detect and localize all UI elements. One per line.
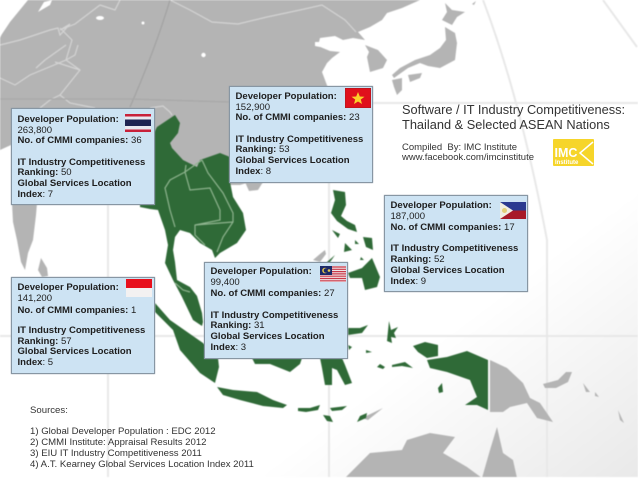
panel: Thailand: Ranking: 50	[18, 167, 72, 178]
compiled by credit: Compiled By: IMC Institute	[402, 142, 517, 153]
panel: Thailand: Index: 7	[18, 189, 53, 200]
title: Thailand & Selected ASEAN Nations	[402, 117, 610, 132]
panel: Philippines: 187,000	[390, 211, 425, 222]
panel: Vietnam: IT Industry Competitiveness	[236, 134, 363, 145]
panel: Vietnam: Developer Population:	[236, 91, 337, 102]
panel: Thailand: Global Services Location	[18, 178, 132, 189]
panel: Malaysia: Ranking: 31	[210, 320, 265, 331]
title: Software / IT Industry Competitiveness:	[402, 102, 625, 117]
panel: Malaysia: IT Industry Competitiveness	[210, 310, 338, 320]
panel: Philippines: Global Services Location	[390, 265, 505, 276]
panel: Vietnam: No. of CMMI companies: 23	[236, 112, 360, 123]
panel: Vietnam: Index: 8	[236, 166, 271, 177]
green land: Indonesia, Malaysia, Thailand, Vietnam, Philippines and neighbours	[140, 115, 488, 422]
panel: Indonesia: Developer Population:	[18, 282, 119, 293]
panel: Malaysia	[204, 262, 348, 359]
panel: Philippines: Ranking: 52	[390, 254, 445, 265]
panel: Philippines: Index: 9	[390, 276, 426, 286]
sources: 1) Global Developer Population : EDC 2012	[30, 426, 216, 437]
sources	[30, 405, 254, 470]
sources: Sources:	[30, 405, 68, 416]
panel: Thailand	[11, 108, 155, 205]
panel: Philippines: IT Industry Competitiveness	[390, 243, 518, 254]
panel: Philippines	[384, 195, 528, 292]
compiled by credit: www.facebook.com/imcinstitute	[402, 152, 534, 163]
panel: Philippines: No. of CMMI companies: 17	[390, 222, 515, 233]
icon: IMC Institute logo: Institute	[555, 160, 579, 166]
sources: 2) CMMI Institute: Appraisal Results 2012	[30, 437, 206, 448]
flag: Indonesia	[126, 279, 152, 297]
panel: Thailand: IT Industry Competitiveness	[18, 157, 145, 168]
panel: Malaysia: Developer Population:	[210, 266, 312, 277]
flag: Thailand	[125, 114, 151, 132]
panel: Vietnam: Global Services Location	[236, 155, 350, 166]
panel: Indonesia: IT Industry Competitiveness	[18, 325, 145, 336]
panel: Thailand: 263,800	[18, 124, 52, 136]
flag: Philippines	[500, 202, 526, 219]
panel: Vietnam	[229, 86, 373, 183]
panel: Indonesia: Index: 5	[18, 357, 53, 368]
title	[402, 102, 625, 132]
icon: IMC Institute logo	[553, 139, 594, 166]
panel: Indonesia: Global Services Location	[18, 346, 132, 357]
panel: Indonesia: Ranking: 57	[18, 336, 72, 347]
panel: Malaysia: Global Services Location	[210, 331, 325, 342]
sources: 4) A.T. Kearney Global Services Location Index 2011	[30, 459, 254, 470]
panel: Thailand: Developer Population:	[18, 114, 119, 125]
flag: Vietnam	[345, 88, 371, 108]
panel: Indonesia: 141,200	[18, 293, 52, 304]
panel: Thailand: No. of CMMI companies: 36	[18, 135, 142, 146]
white inland lakes and seas	[0, 0, 320, 57]
flag: Malaysia	[320, 266, 346, 282]
icon: IMC Institute logo: IMC	[554, 146, 577, 160]
panel: Vietnam: 152,900	[236, 102, 270, 113]
panel: Indonesia: No. of CMMI companies: 1	[18, 304, 136, 316]
panel: Malaysia: Index: 3	[210, 342, 246, 353]
panel: Vietnam: Ranking: 53	[236, 144, 290, 155]
panel: Indonesia	[11, 277, 155, 374]
panel: Philippines: Developer Population:	[390, 200, 492, 211]
panel: Malaysia: 99,400	[210, 277, 240, 288]
internal country borders	[165, 160, 233, 292]
sources: 3) EIU IT Industry Competitiveness 2011	[30, 448, 202, 459]
compiled by credit	[402, 142, 534, 163]
panel: Malaysia: No. of CMMI companies: 27	[210, 288, 335, 299]
land borders on gray	[0, 0, 356, 115]
